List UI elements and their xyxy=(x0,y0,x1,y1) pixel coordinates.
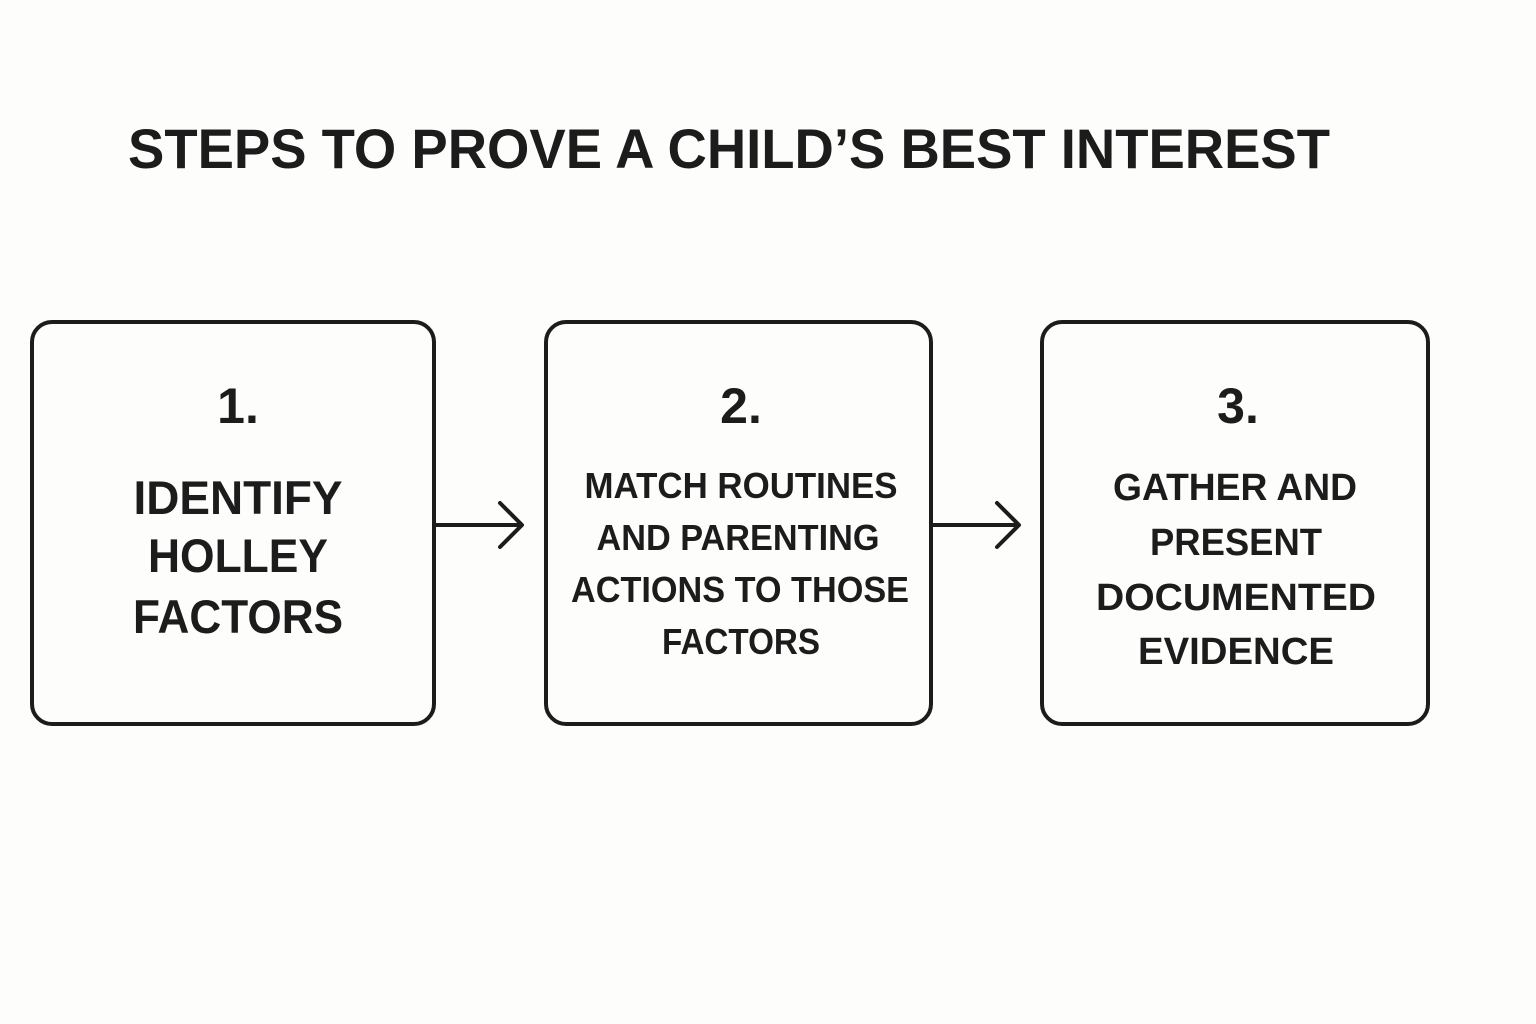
step 3 text: PRESENT xyxy=(1150,522,1322,564)
step 3 text: EVIDENCE xyxy=(1138,631,1334,673)
step 2 text: MATCH ROUTINES xyxy=(584,465,898,506)
step 3 text: DOCUMENTED xyxy=(1096,577,1376,619)
arrow 1 xyxy=(436,503,522,547)
panel: step 1 xyxy=(32,322,434,724)
step 3 text xyxy=(1096,467,1376,673)
step 2 number: 2. xyxy=(720,378,762,434)
step 2 text: ACTIONS TO THOSE xyxy=(571,569,909,610)
panel: step 2 xyxy=(546,322,931,724)
step 1 text: FACTORS xyxy=(133,590,343,643)
step 1 number: 1. xyxy=(217,378,259,434)
arrow 2 xyxy=(933,503,1019,547)
step 2 text: AND PARENTING xyxy=(596,517,880,558)
step 2 text xyxy=(571,465,909,662)
title: STEPS TO PROVE A CHILD’S BEST INTEREST xyxy=(128,117,1330,180)
step 3 text: GATHER AND xyxy=(1113,467,1357,509)
step 1 text: IDENTIFY xyxy=(134,471,342,524)
step 1 text xyxy=(133,471,343,643)
step 2 text: FACTORS xyxy=(662,621,820,662)
panel: step 3 xyxy=(1042,322,1428,724)
step 1 text: HOLLEY xyxy=(148,529,328,582)
step 3 number: 3. xyxy=(1217,378,1259,434)
